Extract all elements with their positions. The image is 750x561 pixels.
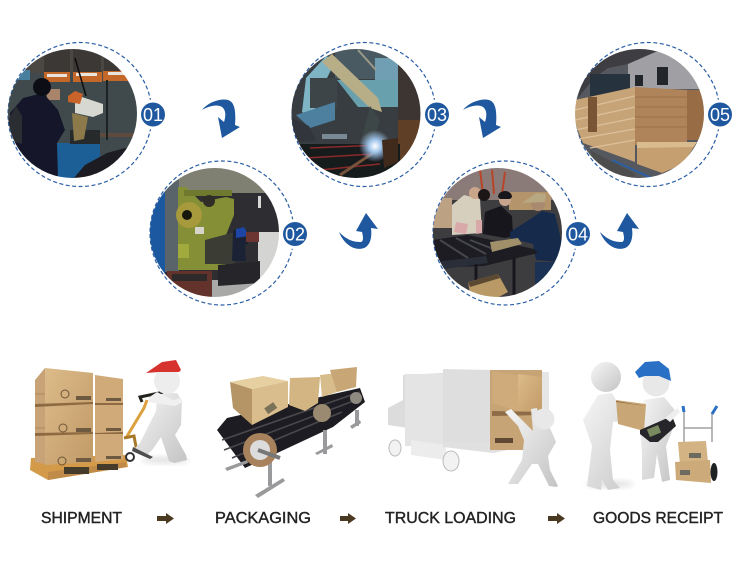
arrow: truck loading to goods receipt (548, 513, 565, 524)
badge 03 (422, 100, 452, 130)
badge 05: 05 (710, 105, 730, 125)
open door with cartons (490, 370, 549, 450)
photo 02: green punch press (150, 168, 280, 298)
dashed ring 05 (576, 42, 720, 186)
arrow: 02 to 03 (339, 213, 378, 249)
carton being handed over (616, 400, 646, 431)
label: truck loading: TRUCK LOADING (385, 510, 516, 527)
arrow: 03 to 04 (463, 99, 501, 138)
white figure with red cap (132, 360, 189, 463)
illustration: goods receipt (583, 361, 718, 490)
white worker lifting carton (505, 408, 558, 487)
label: goods receipt: GOODS RECEIPT (593, 510, 724, 527)
hand truck with cartons (675, 406, 718, 483)
pallet jack (124, 392, 164, 461)
label: shipment: SHIPMENT (41, 510, 123, 527)
badge 01: 01 (143, 105, 163, 125)
panel: step 04 assembly (432, 161, 593, 305)
badge 04 (563, 219, 593, 249)
pallet (30, 455, 128, 480)
arrow: shipment to packaging (157, 513, 174, 524)
arrow: 04 to 05 (600, 213, 639, 249)
badge 04: 04 (568, 224, 588, 244)
dashed ring 04 (433, 161, 577, 305)
figure with grey head (583, 362, 645, 490)
panel: step 01 machining (8, 42, 168, 186)
badge 05 (705, 100, 735, 130)
illustration: packaging conveyor (217, 367, 365, 498)
arrow: 01 to 02 (202, 99, 240, 138)
cartons on belt (230, 367, 357, 425)
illustration: shipment pallet and figure (30, 360, 189, 480)
badge 02 (280, 219, 310, 249)
photo 01: worker at cutting machine (8, 49, 138, 179)
panel: step 05 warehouse (574, 42, 735, 186)
dashed ring 01 (8, 42, 152, 186)
badge 03: 03 (427, 105, 447, 125)
badge 01 (138, 100, 168, 130)
stacked cartons (35, 368, 123, 465)
truck body (388, 369, 533, 471)
label: packaging: PACKAGING (215, 510, 311, 527)
conveyor belt (217, 388, 365, 468)
panel: step 03 robot welding (291, 42, 452, 186)
illustration: truck loading (388, 369, 558, 487)
dashed ring 03 (292, 42, 436, 186)
photo 05: stacked cartons in warehouse (574, 49, 706, 182)
badge 02: 02 (285, 224, 305, 244)
photo 03: welding robot (291, 49, 422, 180)
gears (243, 392, 362, 467)
figure with blue cap (635, 361, 674, 482)
conveyor legs (225, 410, 361, 498)
photo 04: workers assembling at table (432, 168, 564, 299)
panel: step 02 punch press (150, 161, 310, 305)
arrow: packaging to truck loading (340, 513, 356, 524)
dashed ring 02 (150, 161, 294, 305)
scanner (640, 408, 680, 442)
